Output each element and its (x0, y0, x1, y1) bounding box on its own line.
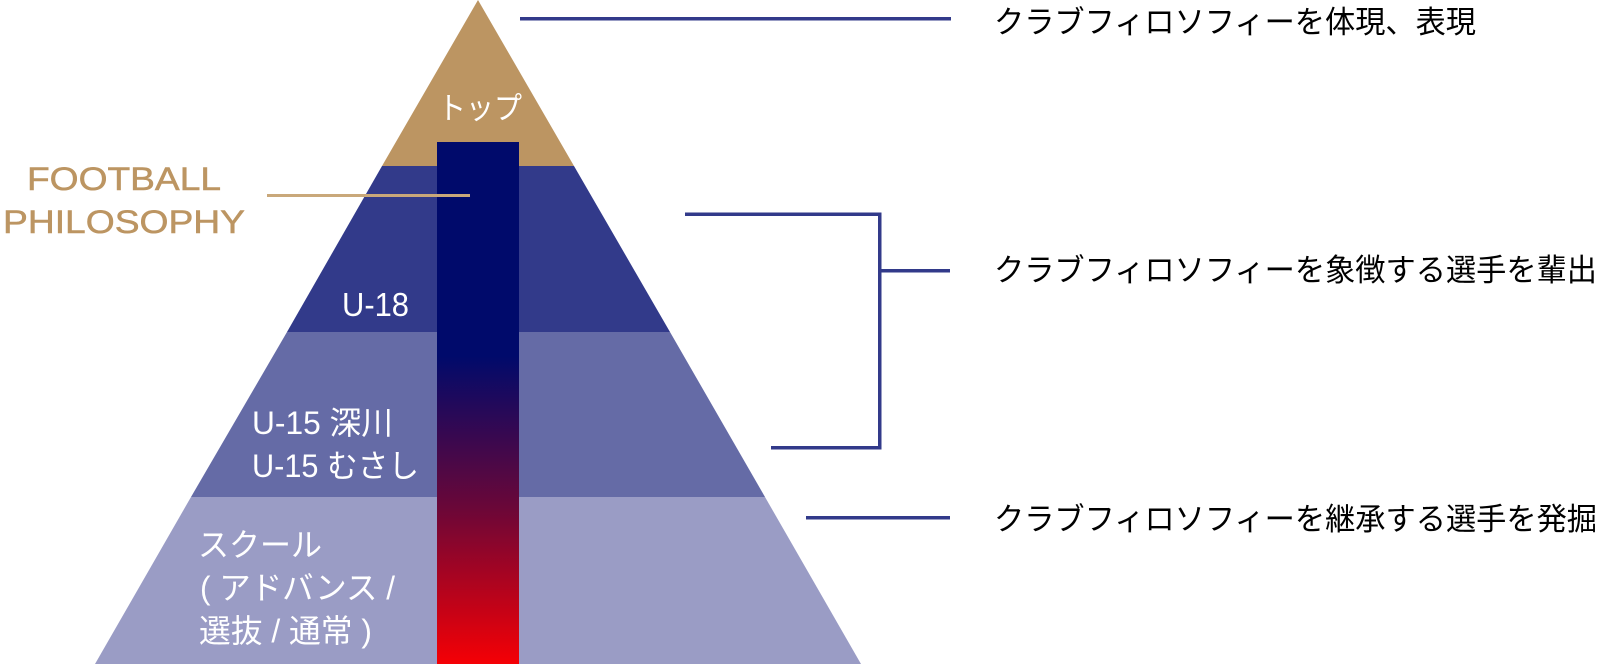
label: top: トップ (438, 91, 522, 126)
label: school: 選抜 / 通常 ) (199, 613, 372, 649)
connector: school (806, 516, 950, 520)
bracket connector: middle tiers (685, 212, 950, 450)
label: school: ( アドバンス / (200, 570, 395, 606)
tier: school (95, 497, 861, 664)
football philosophy leader line (267, 194, 470, 197)
description: middle: クラブフィロソフィーを象徴する選手を輩出 (994, 253, 1597, 288)
central gradient bar (437, 142, 519, 664)
tier: U-18 (287, 166, 670, 332)
label: U-15 (252, 405, 419, 484)
tier: top (382, 0, 574, 166)
football philosophy label (3, 161, 245, 240)
label: U-15: U-15 深川 (252, 405, 393, 441)
pyramid (95, 0, 861, 664)
tier: U-15 (191, 332, 765, 497)
description: school: クラブフィロソフィーを継承する選手を発掘 (994, 502, 1597, 537)
connector: top (520, 17, 951, 20)
label: school (198, 527, 395, 649)
label: school: スクール (198, 527, 322, 563)
label: U-15: U-15 むさし (252, 448, 419, 484)
football philosophy label: FOOTBALL (27, 161, 221, 197)
football philosophy label: PHILOSOPHY (3, 204, 245, 240)
label: U-18: U-18 (342, 286, 409, 323)
description: top: クラブフィロソフィーを体現、表現 (994, 5, 1476, 40)
